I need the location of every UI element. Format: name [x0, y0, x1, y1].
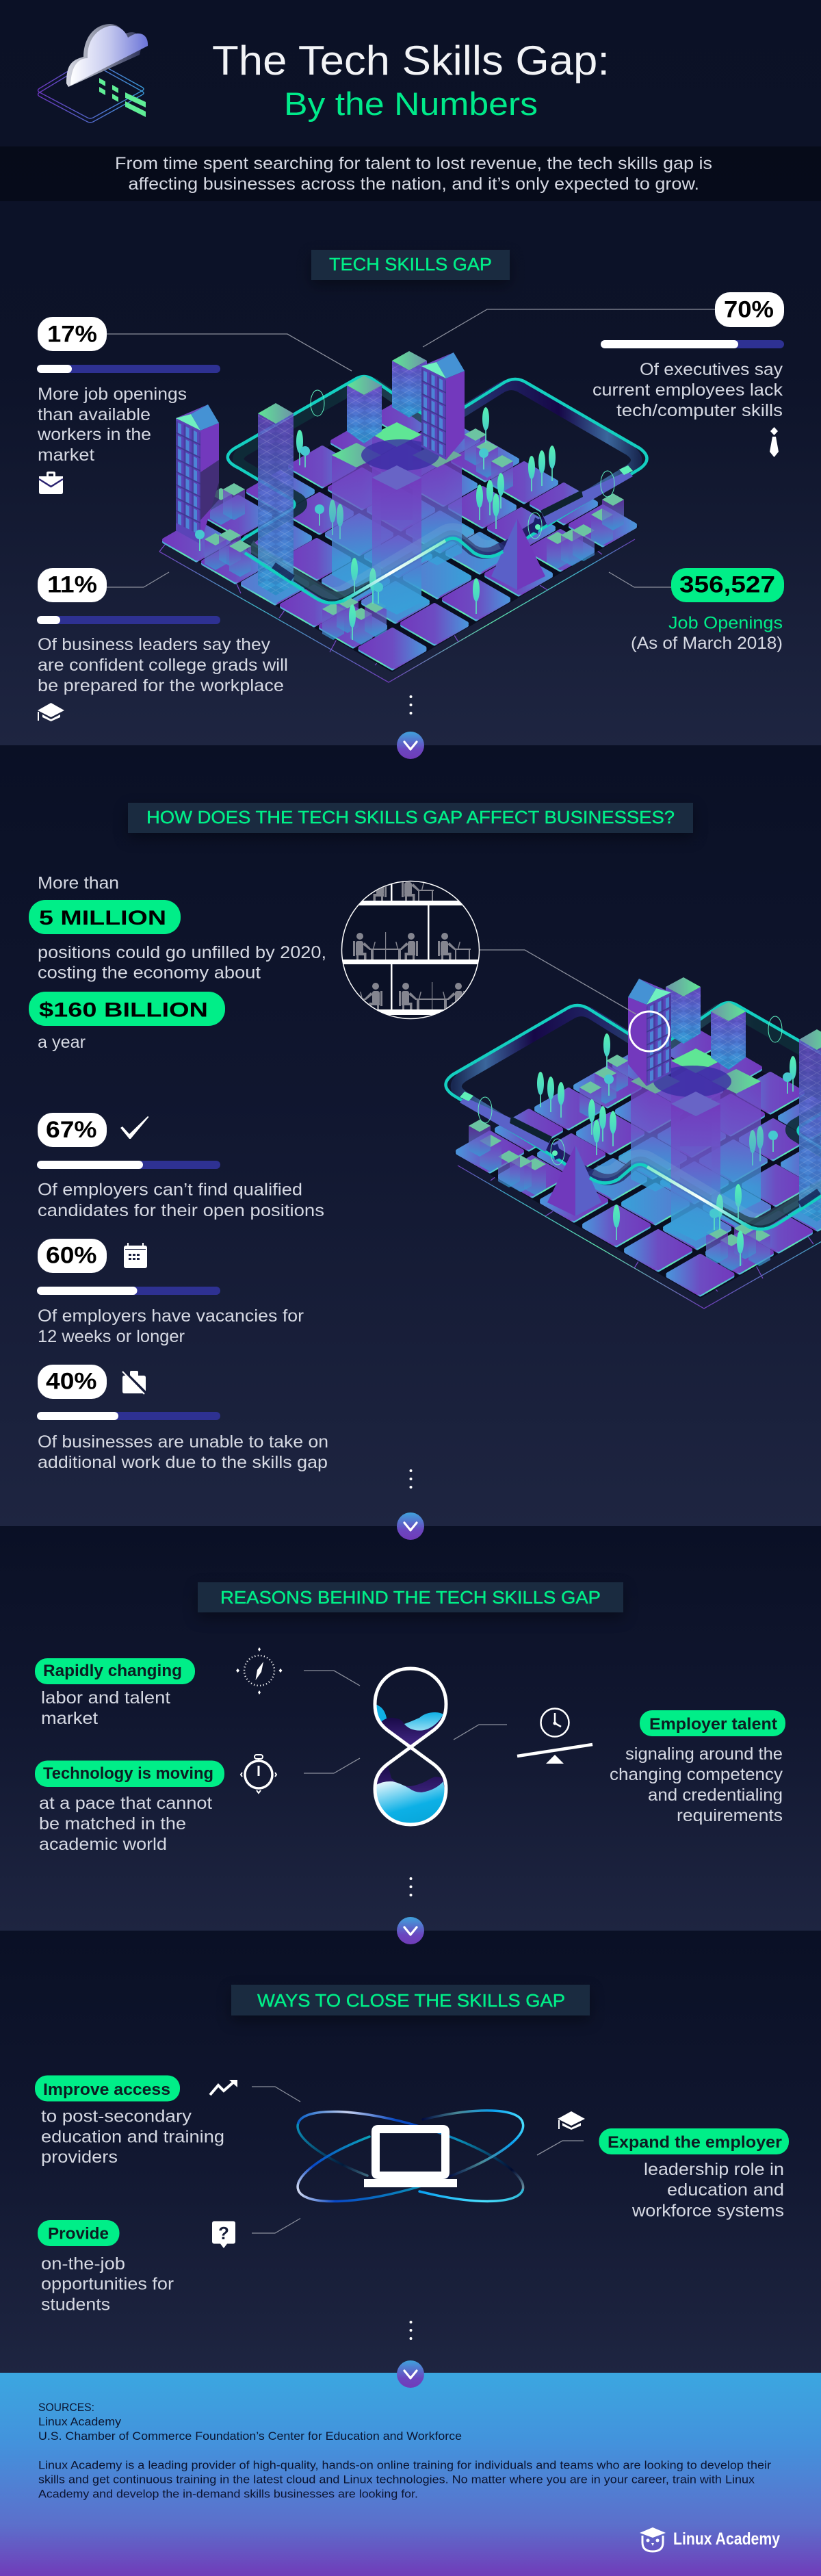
- sources: [38, 2401, 462, 2443]
- reason: employer talent: signaling around the: [625, 1744, 783, 1764]
- subtitle: By the Numbers: [284, 86, 538, 122]
- stat: 40 percent: 40%: [46, 1369, 97, 1395]
- stat: 67 percent: Of employers can’t find qualified: [38, 1180, 302, 1199]
- icon: clock on balance: [517, 1708, 592, 1764]
- text: unfilled positions: 5 MILLION: [39, 907, 166, 929]
- reason: technology is moving: [35, 1760, 224, 1854]
- callout: office magnifier: [335, 874, 669, 1051]
- text: unfilled positions: [29, 873, 326, 1052]
- pyramid: [491, 519, 545, 590]
- stat: 70 percent: 70%: [724, 297, 774, 323]
- reason: rapidly changing: market: [41, 1709, 98, 1728]
- icon: stopwatch: [241, 1755, 276, 1793]
- stat: 70 percent: Of executives say: [640, 360, 783, 379]
- way: expand the employer: workforce systems: [631, 2201, 784, 2220]
- reason: rapidly changing: [35, 1658, 195, 1728]
- dots: [409, 1469, 412, 1489]
- icon: crossed briefcase: [122, 1371, 146, 1394]
- reason: technology is moving: at a pace that cannot: [39, 1794, 212, 1813]
- way: expand the employer: Expand the employer: [608, 2133, 782, 2152]
- way: provide: Provide: [48, 2224, 109, 2243]
- dots: [409, 695, 412, 714]
- about paragraph: skills and get continuous training in the latest cloud and Linux technologies. No matter where you are in your career, train with Linux: [38, 2473, 755, 2486]
- reason: technology is moving: be matched in the: [39, 1814, 186, 1833]
- rings: [311, 390, 614, 539]
- way: improve access: [35, 2075, 224, 2167]
- way: improve access: providers: [41, 2148, 118, 2167]
- stat: 40 percent: additional work due to the skills gap: [38, 1453, 328, 1472]
- way: expand the employer: education and: [667, 2180, 784, 2200]
- reason: rapidly changing: labor and talent: [41, 1688, 170, 1708]
- stat: 17 percent: market: [38, 446, 94, 465]
- way: provide: opportunities for: [41, 2275, 174, 2294]
- stat: 40 percent: Of businesses are unable to take on: [38, 1432, 328, 1452]
- icon: briefcase: [39, 472, 63, 494]
- stat: 70 percent: current employees lack: [592, 381, 783, 400]
- roofed tower right: [421, 352, 465, 460]
- stat: 11 percent: 11%: [47, 572, 97, 598]
- reason: rapidly changing: Rapidly changing: [43, 1662, 182, 1680]
- panel: reasons behind the gap: [0, 1582, 821, 1931]
- icon: cloud over circuit board: [38, 24, 148, 123]
- stat: 11 percent: Of business leaders say they: [38, 635, 271, 654]
- title: The Tech Skills Gap:: [212, 38, 610, 83]
- way: provide: on-the-job: [41, 2254, 125, 2274]
- reason: technology is moving: academic world: [39, 1835, 167, 1854]
- icon: compass: [236, 1647, 282, 1695]
- stat: job openings: (As of March 2018): [631, 634, 783, 653]
- stat: 67 percent: 67%: [46, 1117, 97, 1143]
- heading: effects on businesses: HOW DOES THE TECH SKILLS GAP AFFECT BUSINESSES?: [146, 807, 675, 827]
- illustration: laptop in orbits: [298, 2111, 523, 2202]
- intro band: [0, 146, 821, 201]
- way: provide: students: [41, 2295, 110, 2315]
- city ground: [161, 400, 639, 672]
- sources: U.S. Chamber of Commerce Foundation’s Center for Education and Workforce: [38, 2430, 462, 2443]
- stat: 17 percent: 17%: [47, 322, 97, 348]
- heading: reasons: [198, 1582, 623, 1612]
- panel: how does the gap affect businesses: [0, 745, 821, 1526]
- glass towers: [332, 422, 462, 615]
- reason: employer talent: requirements: [677, 1806, 783, 1825]
- illustration: isometric city mirrored: [446, 977, 821, 1309]
- way: expand the employer: leadership role in: [644, 2160, 784, 2179]
- stat: 67 percent: [37, 1113, 324, 1220]
- icon: trend arrow: [210, 2080, 237, 2095]
- stat: 70 percent: tech/computer skills: [616, 401, 783, 420]
- about paragraph: Academy and develop the in-demand skills businesses are looking for.: [38, 2487, 418, 2501]
- stat: job openings: Job Openings: [668, 613, 783, 632]
- way: expand the employer: [599, 2128, 789, 2220]
- about paragraph: [38, 2458, 771, 2501]
- icon: graduation cap: [558, 2111, 585, 2130]
- dots: [409, 1877, 412, 1896]
- heading: tech skills gap: TECH SKILLS GAP: [329, 254, 492, 274]
- laptop: [364, 2125, 457, 2187]
- stat: 11 percent: be prepared for the workplace: [38, 676, 284, 695]
- arrow: next section 3: [397, 1917, 424, 1944]
- logo: linux academy: Linux Academy: [673, 2529, 780, 2549]
- arrow: next section 1: [397, 732, 424, 759]
- loop road front layer: [245, 529, 503, 603]
- reason: employer talent: and credentialing: [648, 1786, 783, 1805]
- panel: tech skills gap section background: [0, 0, 821, 745]
- heading: ways to close: WAYS TO CLOSE THE SKILLS GAP: [257, 1990, 565, 2011]
- city tiles: [164, 398, 635, 668]
- intro band: affecting businesses across the nation, and it’s only expected to grow.: [129, 175, 699, 194]
- heading: reasons: REASONS BEHIND THE TECH SKILLS GAP: [220, 1587, 601, 1608]
- trees: [195, 407, 556, 640]
- reason: employer talent: Employer talent: [649, 1715, 777, 1734]
- stat: job openings: 356,527: [679, 572, 775, 598]
- roofed tower left: [176, 404, 219, 544]
- icon: question bubble: [212, 2221, 235, 2248]
- reason: employer talent: [610, 1710, 785, 1825]
- text: unfilled positions: $160 BILLION: [39, 999, 208, 1021]
- stat: 67 percent: candidates for their open positions: [38, 1201, 324, 1220]
- train on road: [531, 465, 633, 534]
- way: provide: [38, 2220, 174, 2315]
- stat: 17 percent: than available: [38, 405, 151, 424]
- icon: check mark: [120, 1116, 149, 1139]
- icon: graduation cap: [38, 703, 64, 721]
- stat: 17 percent: workers in the: [37, 425, 151, 444]
- heading: effects on businesses: [128, 803, 693, 833]
- panel: footer: [0, 2373, 821, 2576]
- heading: ways to close: [231, 1985, 590, 2015]
- text: unfilled positions: More than: [38, 873, 119, 892]
- stat: 60 percent: [37, 1239, 304, 1346]
- logo: linux academy: [640, 2527, 780, 2551]
- connector lines: [304, 1671, 507, 1773]
- icon: calendar: [124, 1243, 147, 1268]
- icon: question bubble: ?: [218, 2223, 229, 2243]
- stat: 17 percent: More job openings: [38, 385, 187, 404]
- text: unfilled positions: a year: [38, 1033, 86, 1052]
- way: improve access: to post-secondary: [41, 2107, 192, 2126]
- sources: Linux Academy: [38, 2415, 122, 2428]
- intro band: From time spent searching for talent to lost revenue, the tech skills gap is: [115, 154, 712, 173]
- dots: [409, 2321, 412, 2340]
- arrow: next section 4: [397, 2360, 424, 2388]
- loop road back layer: [228, 376, 647, 603]
- sources: SOURCES:: [38, 2401, 94, 2414]
- reason: employer talent: changing competency: [610, 1765, 783, 1784]
- reason: technology is moving: Technology is moving: [43, 1764, 213, 1783]
- illustration: hourglass: [374, 1667, 447, 1826]
- text: unfilled positions: positions could go unfilled by 2020,: [38, 943, 326, 962]
- stat: 17 percent: [37, 317, 352, 465]
- icon: necktie: [770, 427, 779, 457]
- stat: 60 percent: 60%: [46, 1243, 97, 1269]
- lattice towers: [258, 351, 427, 595]
- about paragraph: Linux Academy is a leading provider of high-quality, hands-on online training for individuals and teams who are looking to develop their: [38, 2458, 771, 2472]
- stat: 60 percent: 12 weeks or longer: [38, 1327, 185, 1346]
- stat: 60 percent: Of employers have vacancies for: [38, 1306, 304, 1326]
- stat: job openings: [609, 568, 784, 653]
- text: unfilled positions: costing the economy about: [38, 964, 261, 983]
- city frame: [159, 539, 635, 682]
- connector lines: [252, 2087, 584, 2233]
- stat: 11 percent: are confident college grads will: [38, 656, 288, 675]
- arrow: next section 2: [397, 1512, 424, 1540]
- way: improve access: Improve access: [43, 2081, 170, 2099]
- panel: ways to close the skills gap: [0, 1931, 821, 2373]
- stat: 40 percent: [37, 1365, 328, 1472]
- small buildings: [205, 428, 624, 645]
- stat: 11 percent: [37, 568, 288, 695]
- illustration: isometric city: [159, 351, 647, 682]
- way: improve access: education and training: [41, 2127, 224, 2146]
- orbit rings: [298, 2111, 523, 2202]
- panel: header: [0, 24, 821, 201]
- heading: tech skills gap: [311, 250, 510, 280]
- stat: 70 percent: [423, 292, 784, 420]
